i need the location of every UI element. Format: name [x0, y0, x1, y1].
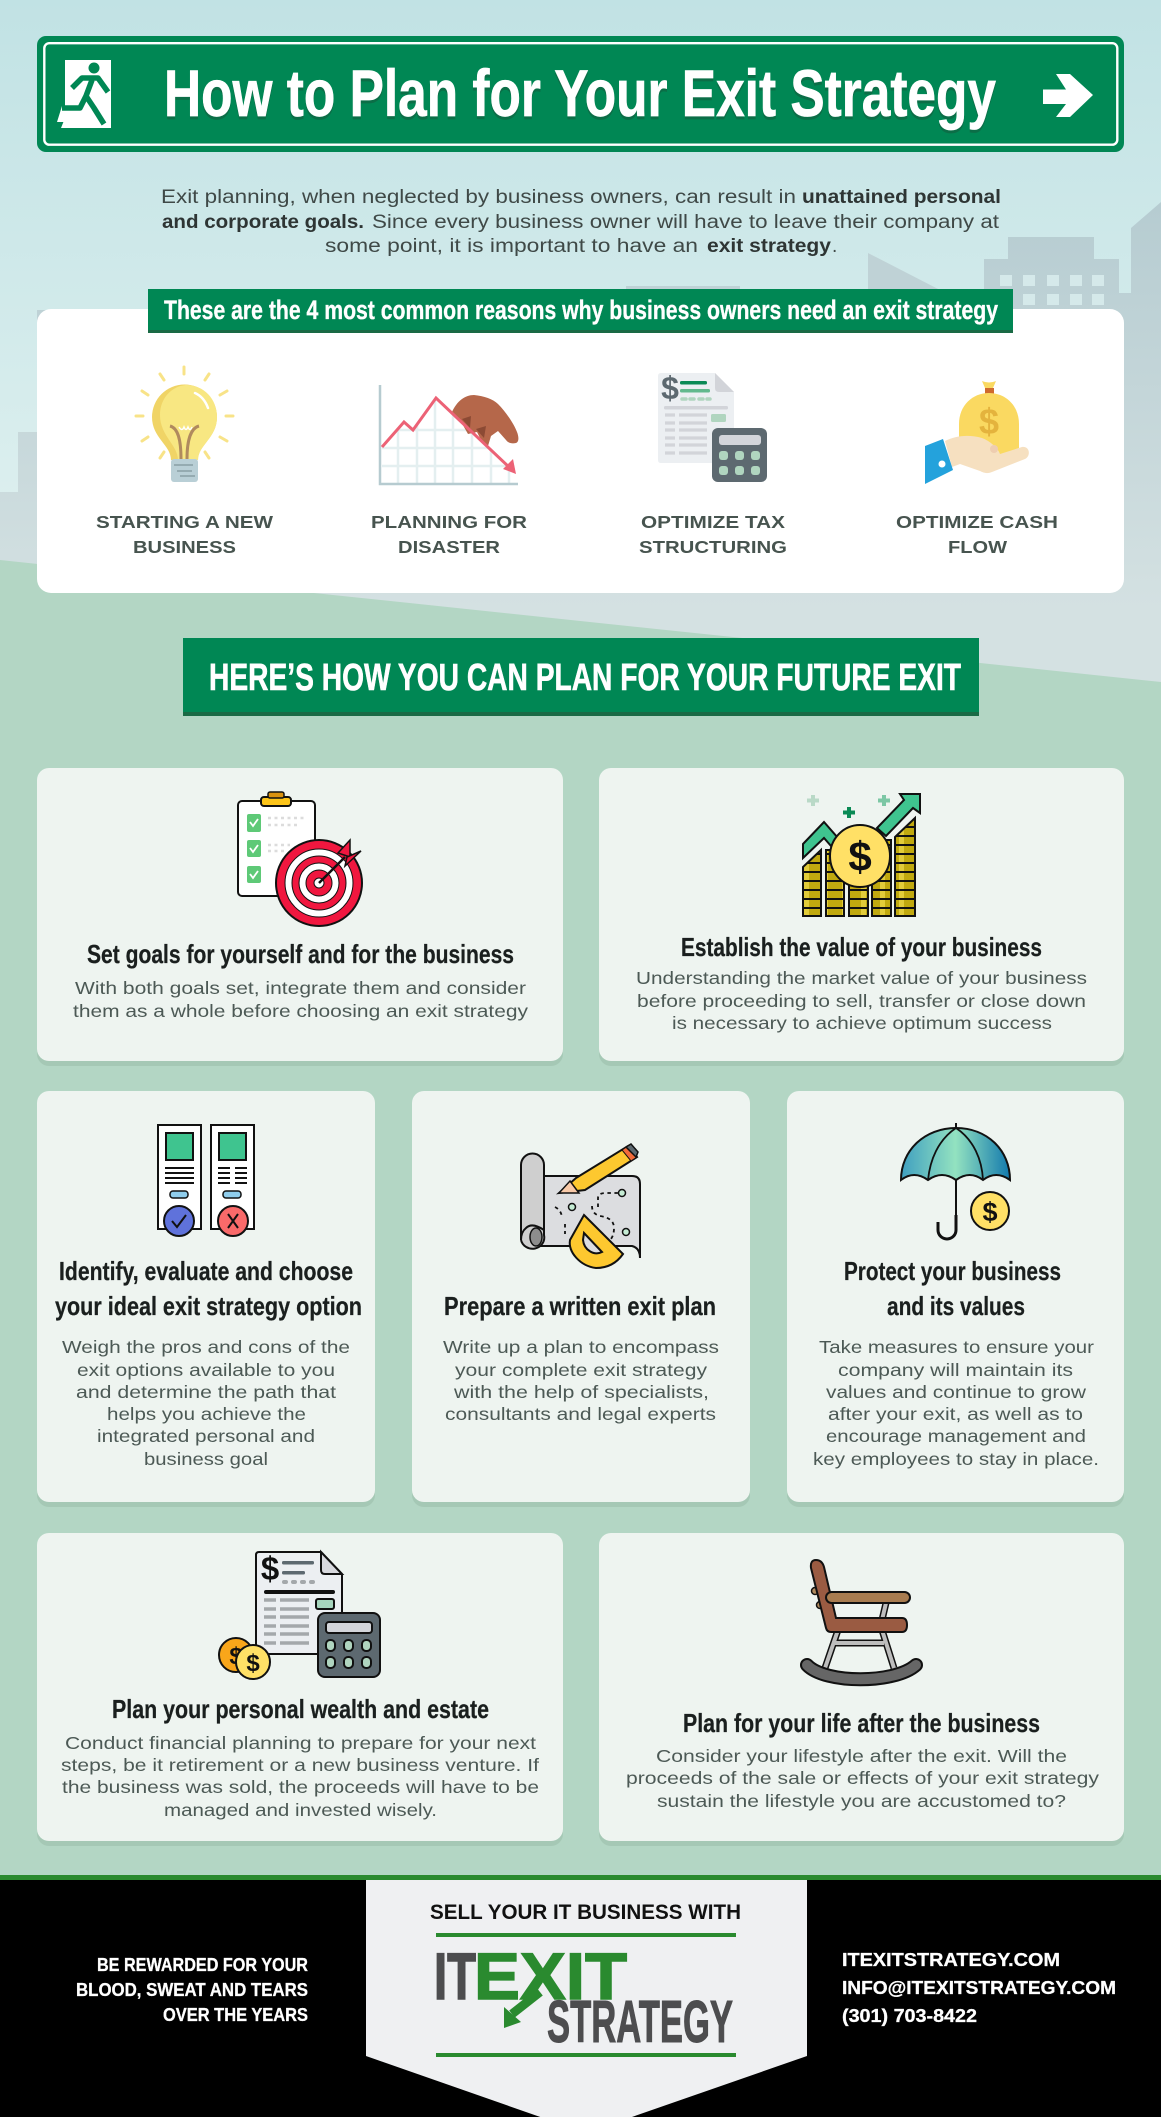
card: protect your business: [787, 1091, 1124, 1507]
heading: Plan your personal wealth and estate: [112, 1694, 489, 1724]
heading: [55, 1256, 362, 1321]
heading: Identify, evaluate and choose: [59, 1256, 353, 1286]
icon: comparison binders: [158, 1125, 254, 1236]
banner: how to plan heading: [183, 638, 979, 716]
heading: Plan for your life after the business: [683, 1708, 1040, 1738]
icon: umbrella and coin: [901, 1123, 1010, 1239]
body text: key employees to stay in place.: [813, 1449, 1099, 1469]
logo badge: [366, 1880, 807, 2117]
heading: and its values: [887, 1291, 1025, 1321]
intro paragraph: .: [832, 236, 837, 257]
icon: coin stacks and arrows: [803, 794, 920, 916]
body text: values and continue to grow: [826, 1382, 1086, 1402]
icon: checklist and target: [238, 792, 362, 926]
label: DISASTER: [398, 537, 500, 557]
icon: falling chart with bear: [380, 385, 518, 484]
body text: Conduct financial planning to prepare for your next: [65, 1733, 536, 1753]
label: OPTIMIZE TAX: [641, 512, 785, 532]
logo badge: SELL YOUR IT BUSINESS WITH: [430, 1901, 741, 1924]
body text: is necessary to achieve optimum success: [672, 1013, 1052, 1033]
body text: [62, 1337, 350, 1469]
label: FLOW: [948, 537, 1008, 557]
footer contact details: [842, 1949, 1116, 2026]
label: OPTIMIZE CASH: [896, 512, 1058, 532]
background: city skyline: [0, 202, 1161, 700]
body text: [61, 1733, 539, 1820]
footer tagline: BLOOD, SWEAT AND TEARS: [76, 1979, 308, 2000]
body text: before proceeding to sell, transfer or close down: [637, 991, 1086, 1011]
card: identify and choose: [37, 1091, 375, 1507]
label: BUSINESS: [133, 537, 236, 557]
icon: document, calculator and coins: $: [229, 1643, 243, 1670]
card: personal wealth: [37, 1533, 563, 1846]
body text: consultants and legal experts: [445, 1404, 716, 1424]
label: [96, 512, 274, 557]
intro paragraph: some point, it is important to have an: [325, 236, 698, 257]
label: [639, 512, 787, 557]
title sign: [37, 36, 1124, 152]
body text: Consider your lifestyle after the exit. Will the: [656, 1746, 1067, 1766]
label: STARTING A NEW: [96, 512, 274, 532]
intro paragraph: Exit planning, when neglected by business owners, can result in: [161, 187, 796, 208]
card: establish value: [599, 768, 1124, 1066]
reason: planning for disaster: [371, 385, 527, 557]
icon: direction arrow: [1043, 74, 1093, 117]
intro paragraph: unattained personal: [802, 187, 1001, 208]
body text: the business was sold, the proceeds will have to be: [62, 1777, 539, 1797]
footer contact details: (301) 703-8422: [842, 2005, 977, 2026]
footer: [0, 1875, 1161, 2117]
body text: sustain the lifestyle you are accustomed to?: [657, 1791, 1066, 1811]
body text: steps, be it retirement or a new business venture. If: [61, 1755, 539, 1775]
card: life after business: [599, 1533, 1124, 1846]
footer tagline: [76, 1954, 308, 2025]
icon: document, calculator and coins: $: [261, 1550, 279, 1587]
heading: Set goals for yourself and for the business: [87, 939, 514, 969]
icon: light bulb: [136, 367, 233, 482]
footer contact details: ITEXITSTRATEGY.COM: [842, 1949, 1060, 1970]
body text: [626, 1746, 1099, 1811]
reason: optimize tax structuring: [639, 370, 787, 557]
body text: Understanding the market value of your business: [636, 968, 1087, 988]
intro paragraph: and corporate goals.: [162, 212, 364, 233]
icon: exit running man: [57, 60, 111, 128]
icon: coin stacks and arrows: $: [848, 833, 872, 880]
body text: helps you achieve the: [107, 1404, 306, 1424]
body text: Take measures to ensure your: [819, 1337, 1094, 1357]
logo: IT EXIT STRATEGY: EXIT: [474, 1939, 627, 2013]
logo: IT EXIT STRATEGY: IT: [434, 1939, 476, 2013]
body text: and determine the path that: [76, 1382, 336, 1402]
background: green hill: [0, 560, 1161, 1880]
panel: 4 reasons: [37, 289, 1124, 593]
body text: With both goals set, integrate them and consider: [75, 978, 526, 998]
label: PLANNING FOR: [371, 512, 527, 532]
icon: hand holding money bag: $: [979, 401, 999, 442]
banner: reasons heading: [148, 289, 1013, 333]
intro paragraph: Since every business owner will have to leave their company at: [372, 212, 1000, 233]
footer tagline: OVER THE YEARS: [163, 2004, 308, 2025]
body text: managed and invested wisely.: [164, 1800, 437, 1820]
label: [371, 512, 527, 557]
heading: your ideal exit strategy option: [55, 1291, 362, 1321]
body text: your complete exit strategy: [455, 1360, 707, 1380]
body text: [636, 968, 1087, 1033]
footer contact details: INFO@ITEXITSTRATEGY.COM: [842, 1977, 1116, 1998]
body text: business goal: [144, 1449, 268, 1469]
icon: umbrella and coin: $: [982, 1197, 998, 1227]
body text: [813, 1337, 1099, 1469]
reason: optimize cash flow: [896, 381, 1058, 557]
icon: blueprint, pencil and protractor: [521, 1144, 640, 1268]
intro paragraph: exit strategy: [707, 236, 831, 257]
heading: Prepare a written exit plan: [444, 1291, 716, 1321]
label: [896, 512, 1058, 557]
heading: Establish the value of your business: [681, 932, 1042, 962]
body text: encourage management and: [826, 1426, 1086, 1446]
body text: [73, 978, 528, 1021]
reason: starting a new business: [96, 367, 274, 557]
icon: document, calculator and coins: $: [246, 1650, 260, 1677]
card: written exit plan: [412, 1091, 750, 1507]
icon: document, calculator and coins: [219, 1550, 380, 1679]
logo: IT EXIT STRATEGY: STRATEGY: [547, 1989, 733, 2055]
intro paragraph: [161, 187, 1001, 257]
body text: Write up a plan to encompass: [443, 1337, 719, 1357]
logo: IT EXIT STRATEGY: [434, 1939, 733, 2055]
icon: tax document and calculator: $: [661, 370, 679, 406]
background: sky: [0, 0, 1161, 620]
card: set goals: [37, 768, 563, 1066]
body text: them as a whole before choosing an exit strategy: [73, 1001, 528, 1021]
icon: hand holding money bag: [925, 381, 1029, 484]
body text: exit options available to you: [77, 1360, 335, 1380]
heading: Protect your business: [844, 1256, 1061, 1286]
body text: integrated personal and: [97, 1426, 315, 1446]
label: STRUCTURING: [639, 537, 787, 557]
body text: proceeds of the sale or effects of your exit strategy: [626, 1768, 1099, 1788]
body text: [443, 1337, 719, 1424]
icon: tax document and calculator: [658, 370, 767, 482]
icon: rocking chair: [807, 1560, 916, 1679]
body text: after your exit, as well as to: [828, 1404, 1083, 1424]
body text: Weigh the pros and cons of the: [62, 1337, 350, 1357]
body text: company will maintain its: [838, 1360, 1073, 1380]
body text: with the help of specialists,: [453, 1382, 709, 1402]
footer tagline: BE REWARDED FOR YOUR: [97, 1954, 308, 1975]
heading: [844, 1256, 1061, 1321]
